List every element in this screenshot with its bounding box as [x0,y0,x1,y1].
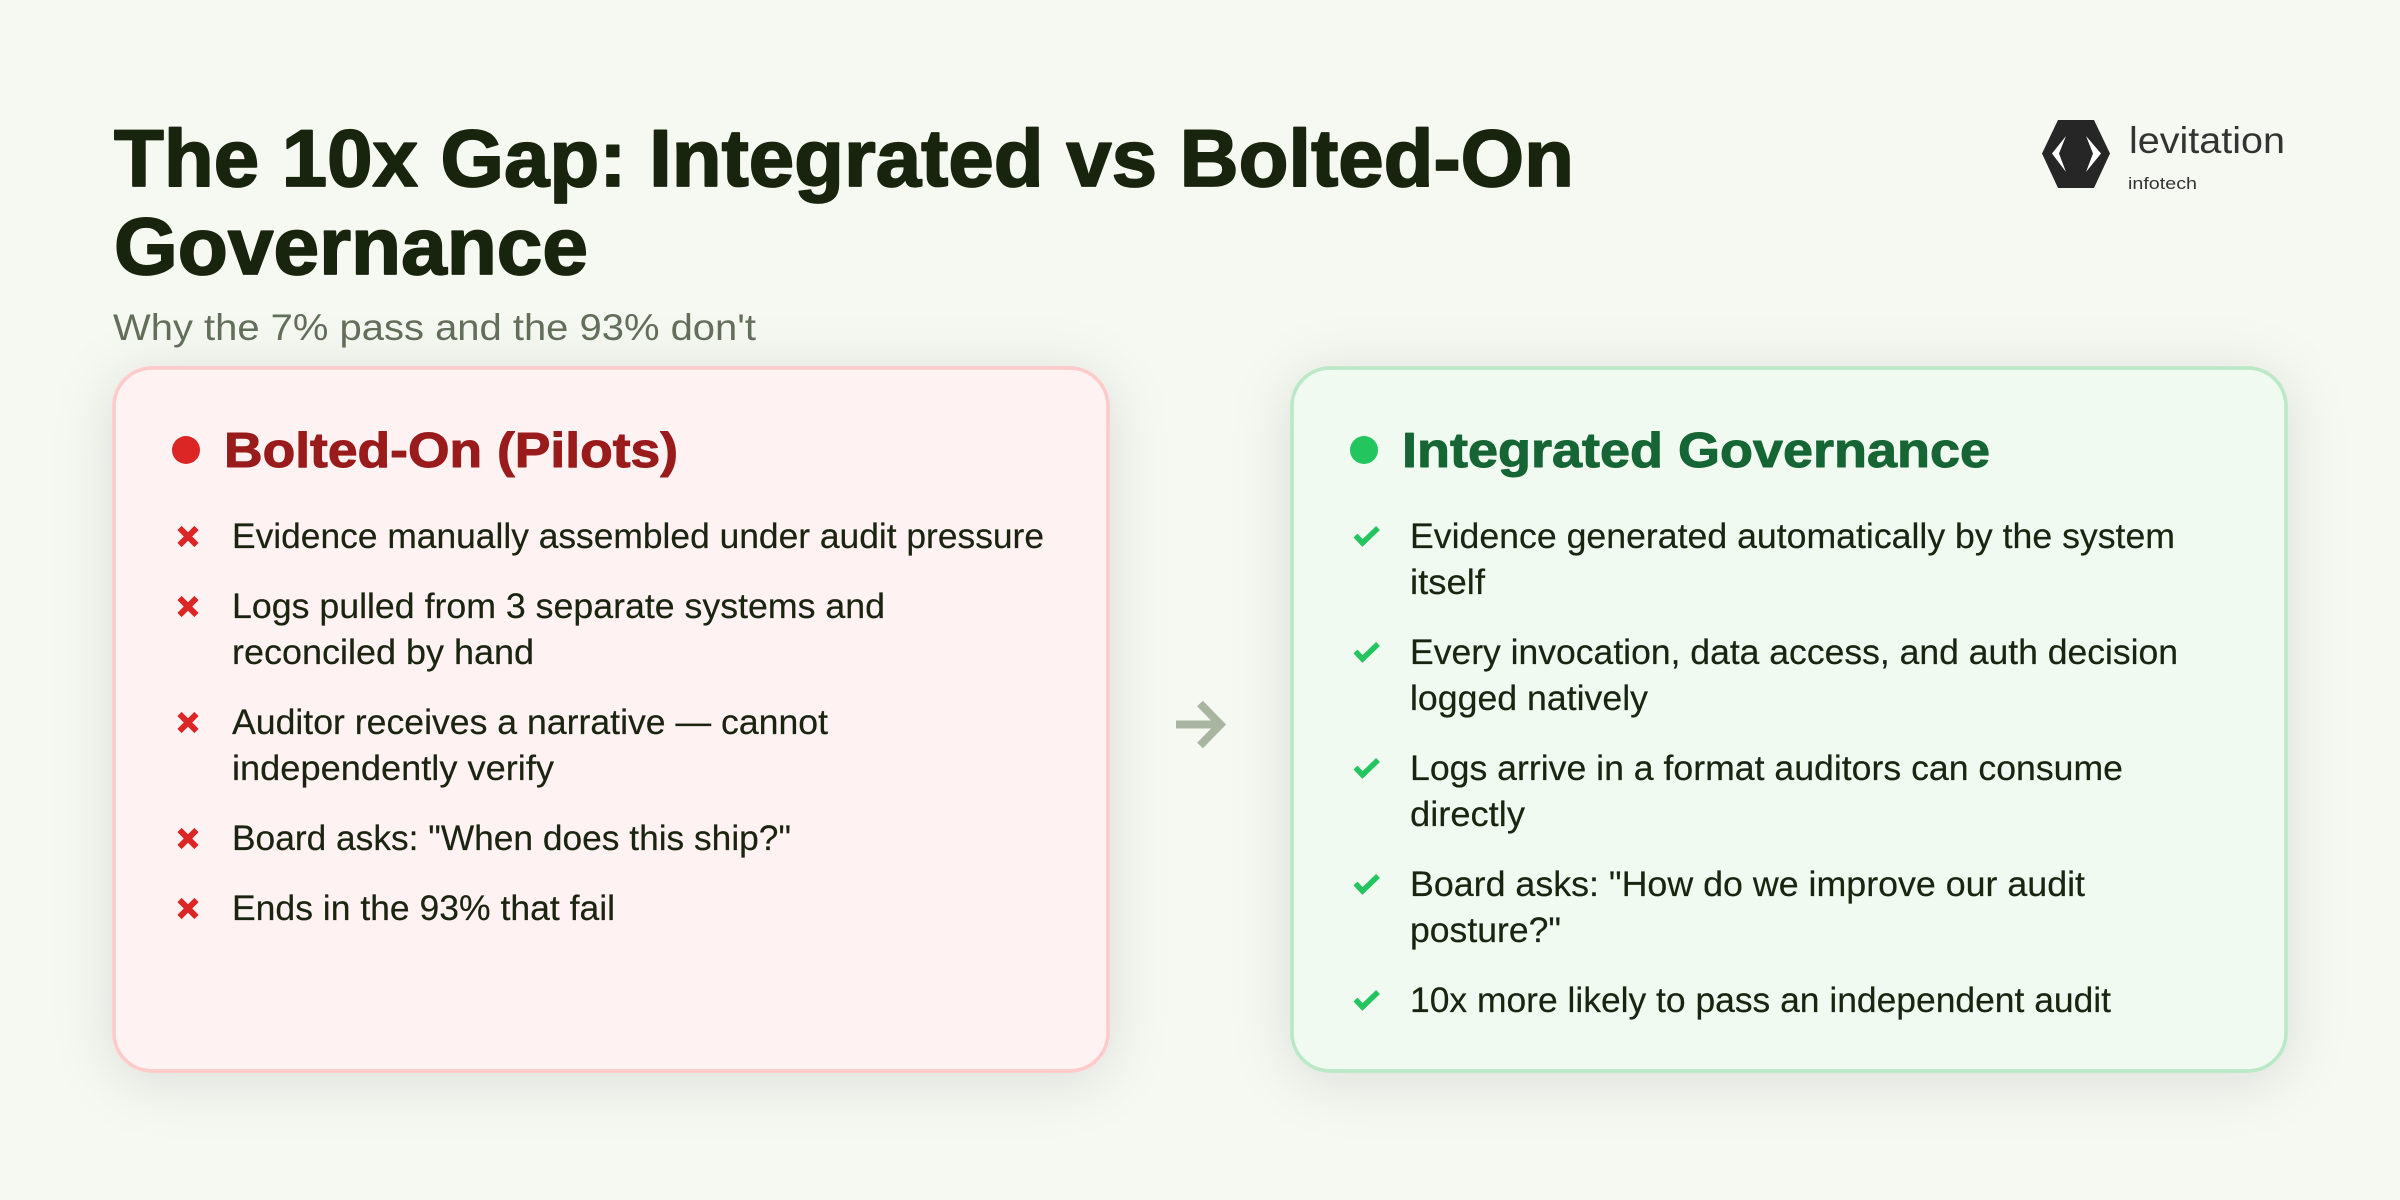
panel heading: bolted-on: Bolted-On (Pilots) [224,424,678,478]
panel: bolted-on [114,368,1108,1071]
list: integrated items [1356,517,2178,1020]
item 2: Logs pulled from 3 separate systems and [232,587,885,626]
panel: integrated governance [1292,368,2286,1071]
item 3: directly [1410,795,1526,834]
icon: hexagon logo mark [2042,120,2110,188]
item 2: reconciled by hand [232,633,534,672]
item 3 [1356,749,2123,834]
item 3: Logs arrive in a format auditors can consume [1410,749,2123,788]
item 2 [1356,633,2178,718]
item 4: Board asks: "When does this ship?" [232,819,791,858]
item 3 [180,703,828,788]
item 2: logged natively [1410,679,1649,718]
item 3: independently verify [232,749,555,788]
item 2: Every invocation, data access, and auth decision [1410,633,2178,672]
subtitle: Why the 7% pass and the 93% don't [113,307,757,348]
title [114,114,1574,292]
item 1: Evidence generated automatically by the system [1410,517,2175,556]
status dot: green [1350,436,1378,464]
item 4 [1356,865,2085,950]
item 1: Evidence manually assembled under audit pressure [232,517,1044,556]
item 4: posture?" [1410,911,1561,950]
item 2 [180,587,885,672]
logo [2042,120,2285,193]
item 1 [1356,517,2175,602]
logo tagline: infotech [2128,174,2197,193]
title: Governance [114,202,588,292]
title: The 10x Gap: Integrated vs Bolted-On [114,114,1574,204]
list: bolted-on items [180,517,1044,928]
item 5: Ends in the 93% that fail [232,889,615,928]
status dot: red [172,436,200,464]
arrow [1176,704,1220,746]
item 3: Auditor receives a narrative — cannot [232,703,828,742]
panel heading: integrated governance: Integrated Governance [1402,424,1990,478]
item 1: itself [1410,563,1485,602]
item 5: 10x more likely to pass an independent audit [1410,981,2111,1020]
item 4: Board asks: "How do we improve our audit [1410,865,2085,904]
logo wordmark: levitation [2129,120,2285,161]
